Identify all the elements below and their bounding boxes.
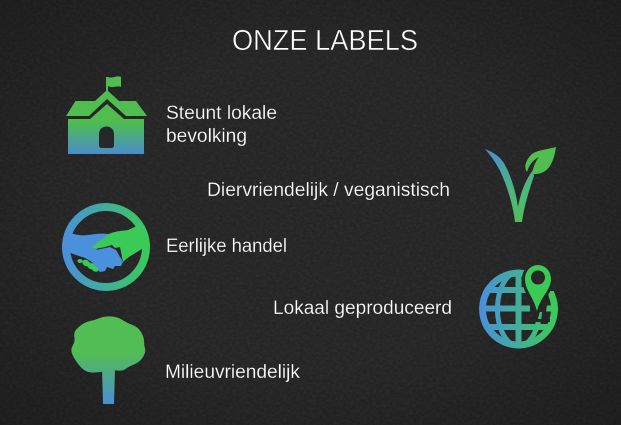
icon: tree — [71, 316, 145, 404]
icon: handshake in ring — [66, 207, 148, 287]
label: Eerlijke handel: Eerlijke handel — [166, 236, 287, 257]
infographic canvas — [54, 30, 562, 404]
label: Steunt lokale bevolking — [166, 103, 277, 147]
label: Steunt lokale bevolking: Steunt lokale — [166, 103, 277, 124]
icon: veganistic leaf V — [485, 147, 556, 222]
icon: school house — [66, 76, 147, 154]
label: Lokaal geproduceerd: Lokaal geproduceerd — [273, 298, 452, 319]
label: Steunt lokale bevolking: bevolking — [166, 126, 247, 147]
icon: globe with location pin — [482, 265, 555, 346]
label: Milieuvriendelijk: Milieuvriendelijk — [165, 362, 300, 383]
title: ONZE LABELS — [232, 25, 418, 57]
label: Diervriendelijk / veganistisch: Diervriendelijk / veganistisch — [207, 180, 450, 201]
